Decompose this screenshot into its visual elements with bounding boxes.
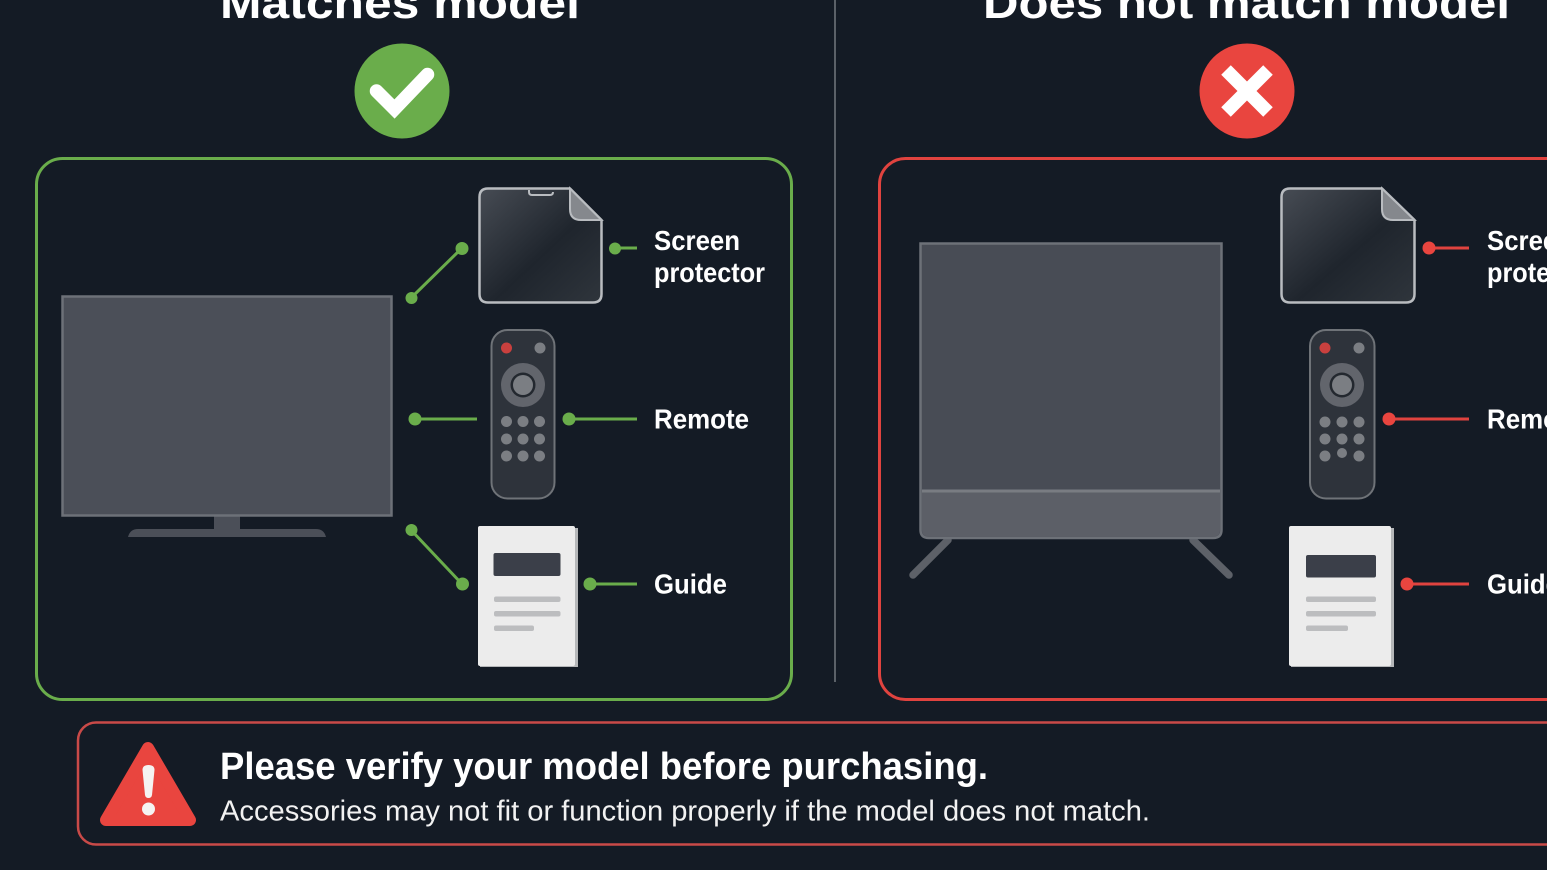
connector: tv to screen protector bbox=[406, 242, 468, 304]
panel: non-matching model bbox=[880, 158, 1547, 700]
television: tall screen with splayed legs bbox=[913, 244, 1229, 575]
callout: guide: Guide bbox=[654, 568, 727, 600]
connector: tv to guide bbox=[406, 524, 469, 590]
icon: guide booklet bbox=[478, 526, 578, 667]
warning detail text: Accessories may not fit or function properly if the model does not match. bbox=[220, 796, 1150, 828]
icon: warning triangle bbox=[106, 748, 190, 820]
callout: screen protector: Screen bbox=[654, 225, 740, 256]
icon: screen protector bbox=[480, 188, 602, 302]
callout: screen protector: protector bbox=[654, 257, 765, 288]
icon: red cross bbox=[1200, 44, 1294, 138]
callout: guide bbox=[1400, 568, 1547, 600]
callout: remote bbox=[1382, 404, 1547, 434]
callout: guide bbox=[584, 568, 727, 600]
icon: screen protector bbox=[1282, 188, 1414, 302]
icon: green check bbox=[354, 44, 450, 138]
icon: remote bbox=[492, 330, 554, 498]
panel: matching model bbox=[36, 158, 792, 700]
warning banner bbox=[78, 722, 1547, 844]
callout: remote bbox=[562, 404, 749, 434]
callout: screen protector bbox=[1422, 225, 1547, 288]
television: widescreen with centre stand bbox=[62, 296, 392, 537]
callout: remote: Remote bbox=[654, 404, 749, 434]
icon: guide booklet bbox=[1289, 526, 1394, 667]
warning headline: Please verify your model before purchasing. bbox=[220, 746, 988, 788]
icon: remote bbox=[1310, 330, 1374, 498]
callout: screen protector bbox=[609, 225, 765, 288]
connector: tv to remote bbox=[408, 412, 477, 426]
